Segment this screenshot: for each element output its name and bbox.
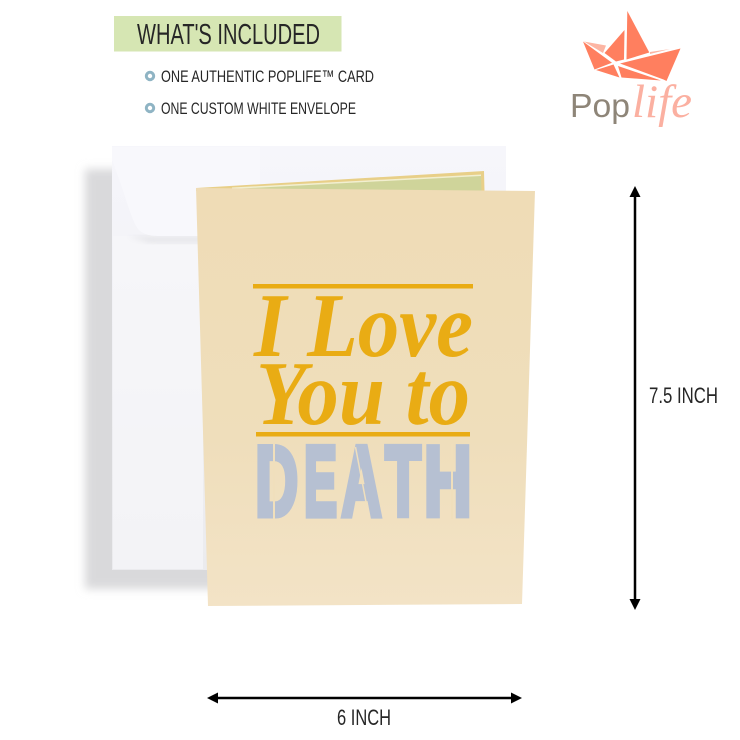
label: 7.5 inch: 7.5 INCH <box>649 383 718 408</box>
top rule <box>253 284 473 288</box>
card text: DEATH: T <box>385 427 421 537</box>
heading: what's included <box>114 16 342 52</box>
card text: DEATH: E <box>304 426 337 537</box>
envelope flap <box>112 147 260 236</box>
arrow: width dimension <box>207 692 522 704</box>
card text: DEATH: A <box>342 427 382 538</box>
card text: DEATH: H <box>424 426 472 537</box>
card front <box>196 188 535 606</box>
item: card: ONE AUTHENTIC POPLIFE™ CARD <box>161 67 374 86</box>
list of included items <box>146 67 374 118</box>
card back panel <box>196 171 484 191</box>
heading: what's included: WHAT'S INCLUDED <box>137 19 320 51</box>
envelope flap shadow <box>128 236 210 243</box>
bullet: envelope <box>146 104 154 112</box>
envelope <box>85 146 506 589</box>
arrow: height dimension <box>630 186 640 610</box>
middle rule <box>256 432 470 436</box>
wordmark: Pop: Pop <box>570 87 630 124</box>
icon: origami boat <box>583 11 680 81</box>
label: 6 inch: 6 INCH <box>337 705 391 730</box>
envelope lower pocket <box>113 236 203 569</box>
card text: DEATH <box>255 426 472 538</box>
envelope shadow <box>85 169 235 589</box>
item: envelope: ONE CUSTOM WHITE ENVELOPE <box>161 99 356 118</box>
envelope body <box>112 146 506 570</box>
wordmark: life: life <box>632 76 692 128</box>
bullet: card <box>146 72 154 80</box>
logo: Poplife <box>570 11 692 128</box>
card text: You to: You to <box>256 343 470 444</box>
card text: DEATH: D <box>255 427 298 537</box>
card text: I Love: I Love <box>253 275 473 376</box>
